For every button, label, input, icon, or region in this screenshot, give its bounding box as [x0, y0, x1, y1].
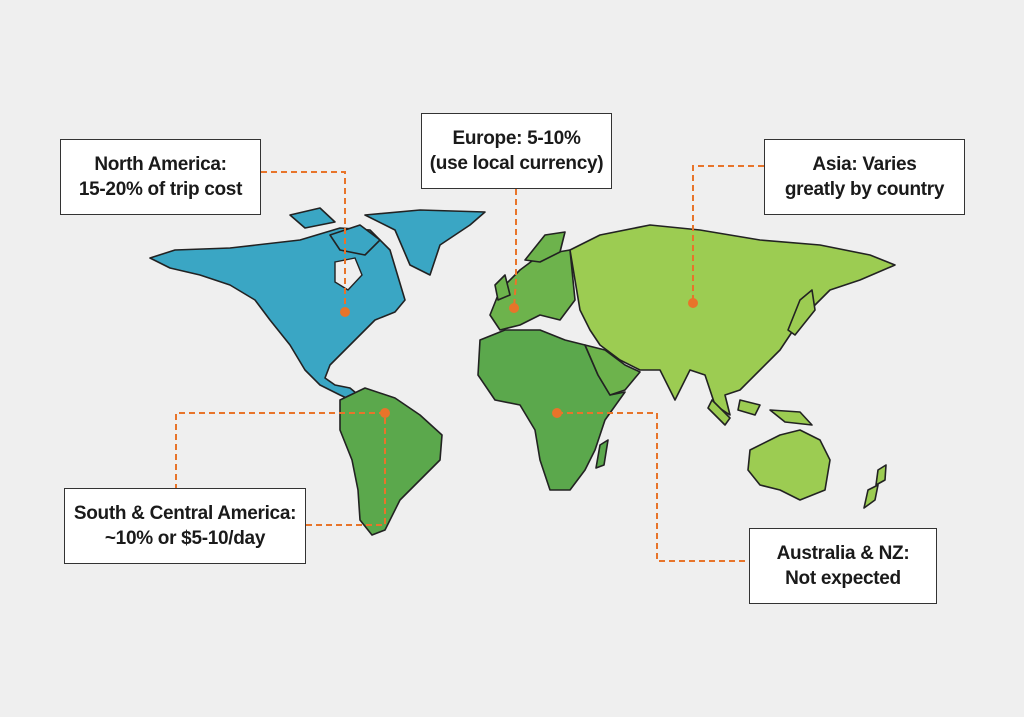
label: North America: North America:	[94, 154, 227, 175]
label: North America	[60, 139, 261, 215]
label: Asia	[764, 139, 965, 215]
label: Australia & NZ: Not expected	[785, 568, 901, 589]
label: Australia & NZ: Australia & NZ:	[777, 543, 909, 564]
dots	[340, 298, 698, 418]
label: Europe	[421, 113, 612, 189]
North America	[150, 208, 485, 402]
label: Asia: greatly by country	[785, 179, 944, 200]
label: Australia & NZ	[749, 528, 937, 604]
label: South & Central America	[64, 488, 306, 564]
label: North America: 15-20% of trip cost	[79, 179, 242, 200]
label: Asia: Asia: Varies	[812, 154, 917, 175]
other continents	[340, 225, 895, 535]
label: South & Central America: South & Central America:	[74, 503, 296, 524]
label: South & Central America: ~10% or $5-10/day	[105, 528, 265, 549]
label: Europe: (use local currency)	[430, 153, 603, 174]
label: Europe: Europe: 5-10%	[452, 128, 581, 149]
connector lines	[176, 166, 764, 561]
Hudson Bay	[335, 258, 362, 290]
